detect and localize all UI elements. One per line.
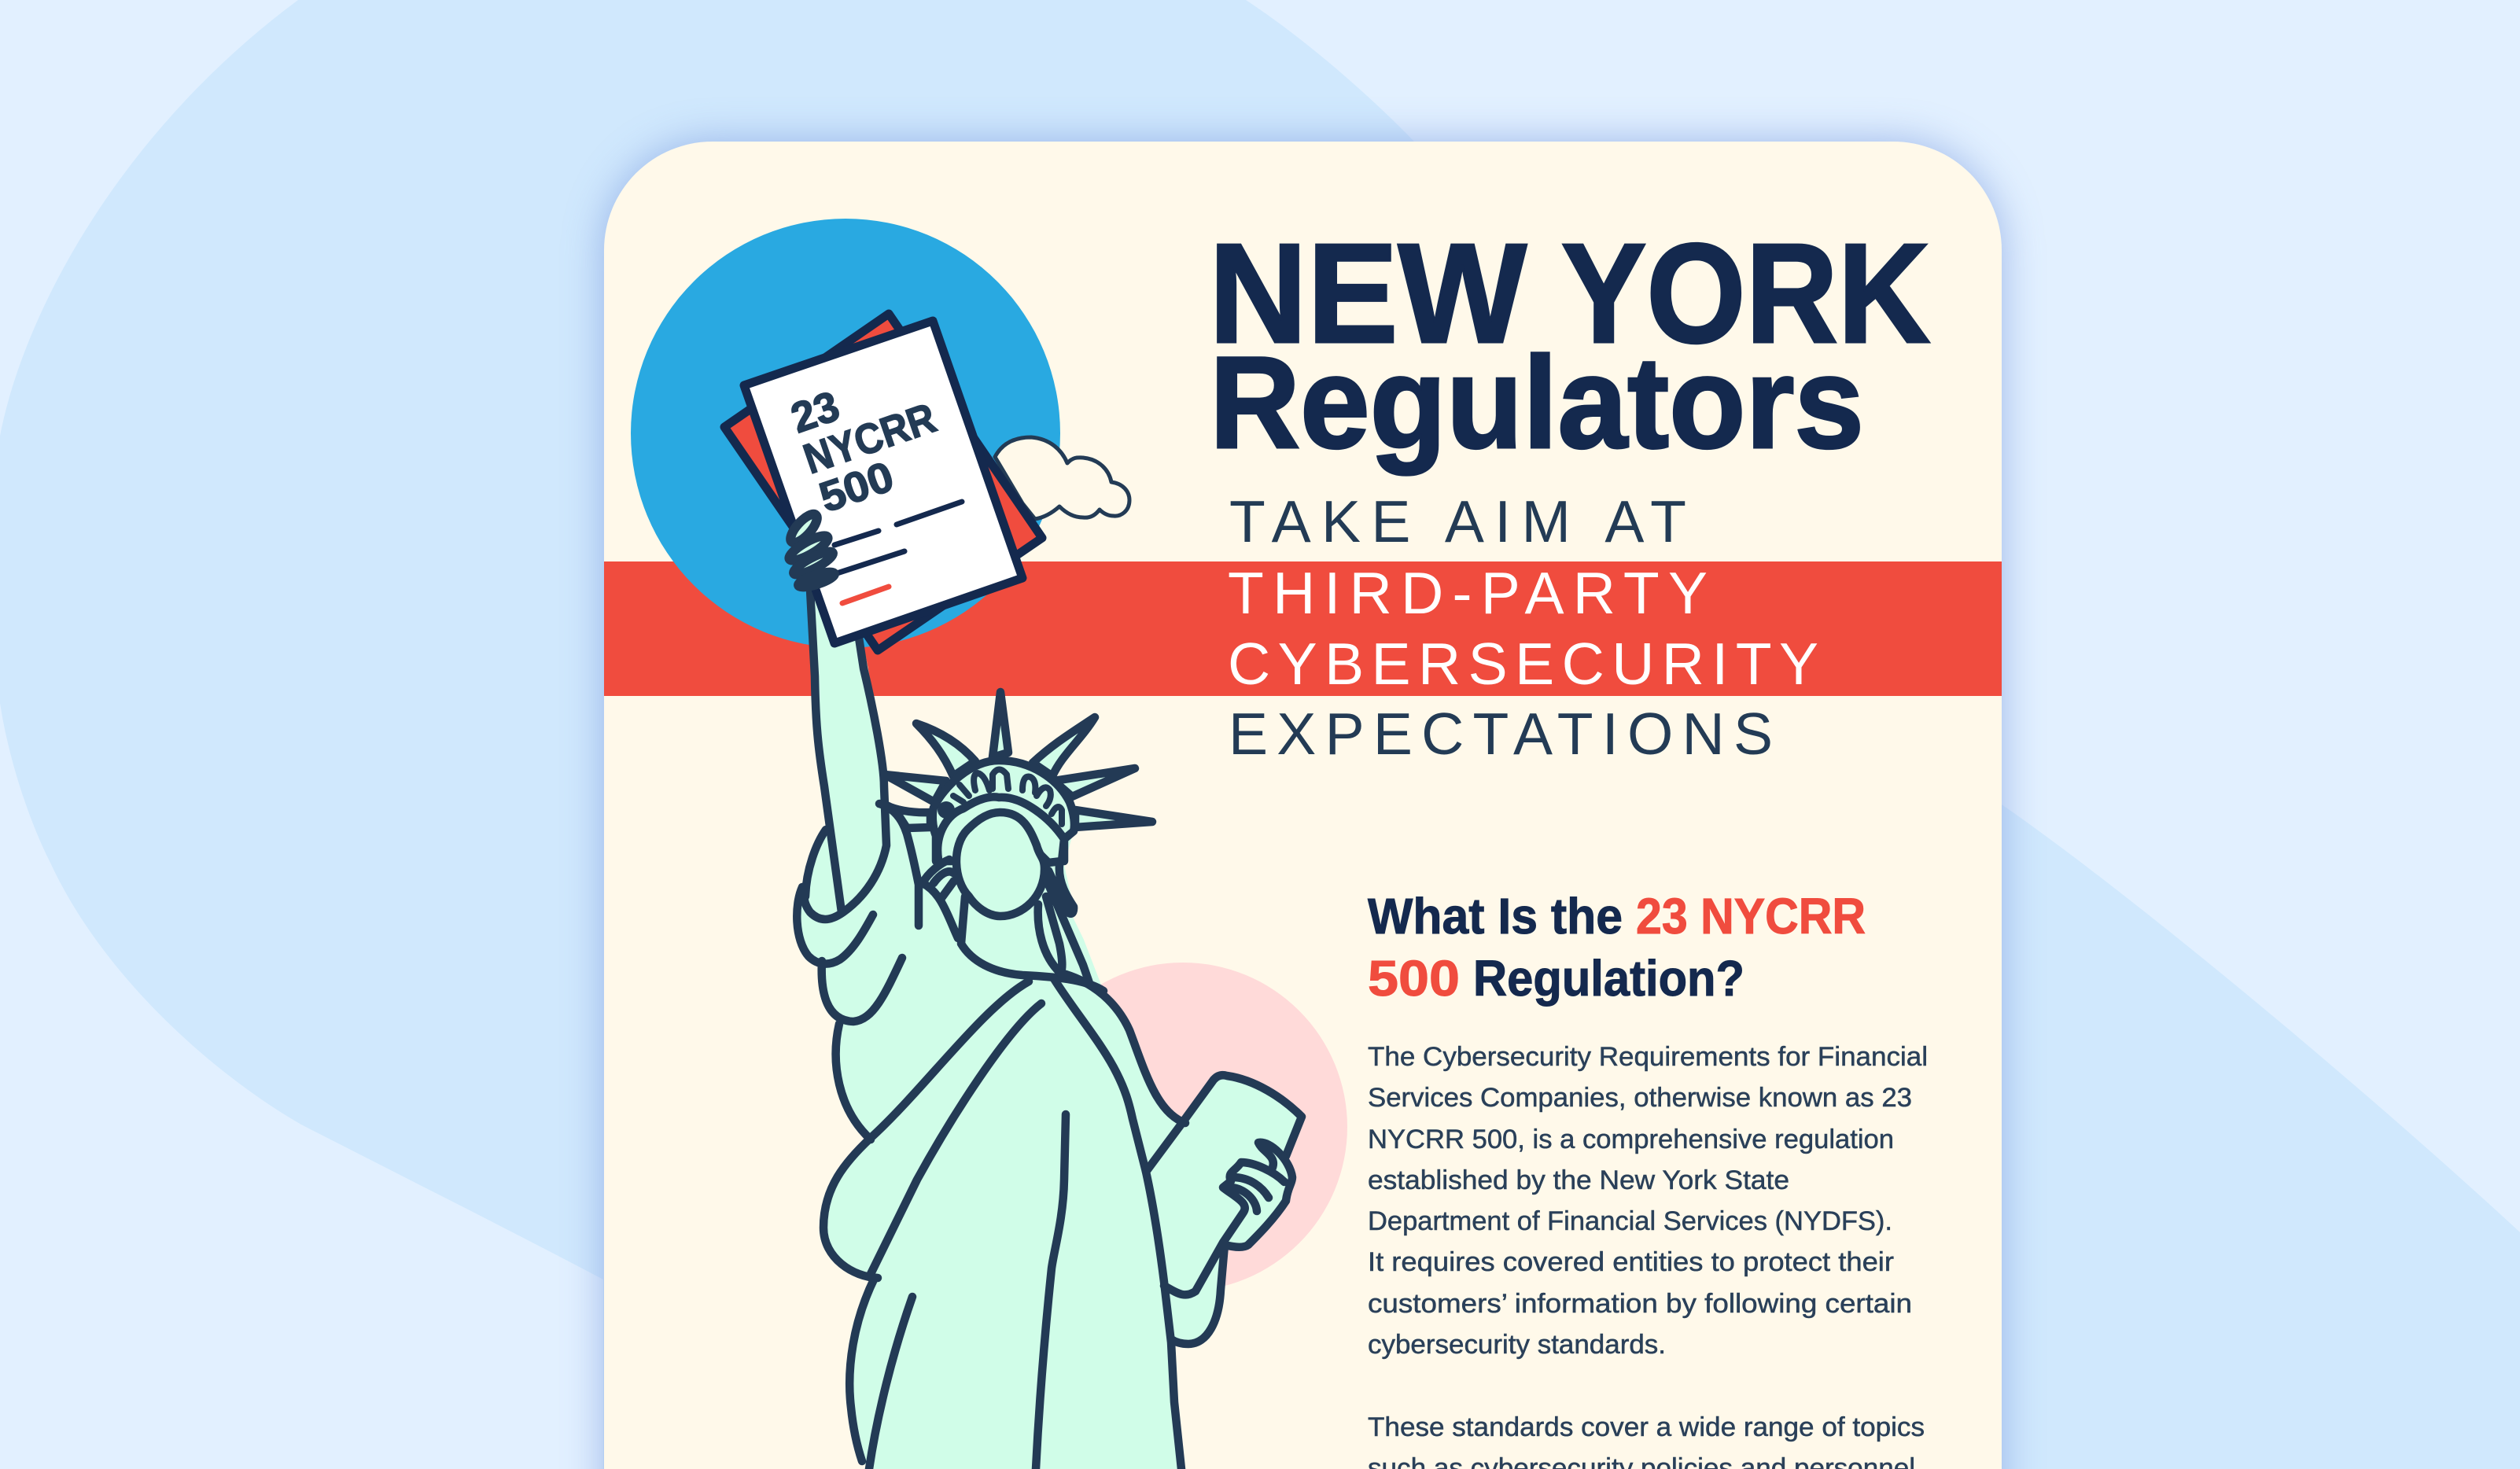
- title: Regulators: [1210, 330, 1864, 476]
- subtitle: THIRD-PARTY: [1228, 560, 1708, 626]
- body text: Department of Financial Services (NYDFS).: [1368, 1206, 1892, 1236]
- raised arm: [810, 590, 842, 912]
- crown rays: [884, 692, 1152, 828]
- card shadow: [604, 142, 2002, 1469]
- body text: [1368, 1042, 1928, 1469]
- statue body fill: [797, 586, 1304, 1469]
- statue of liberty illustration: [797, 586, 1304, 1469]
- body text: The Cybersecurity Requirements for Financial: [1368, 1042, 1928, 1072]
- document title text: 23: [785, 382, 846, 442]
- section heading: Regulation?: [1473, 950, 1744, 1007]
- pink circle: [1019, 963, 1347, 1291]
- left sleeve folds: [797, 804, 919, 1022]
- body text: These standards cover a wide range of topics: [1368, 1412, 1925, 1442]
- subtitle: [1228, 488, 1818, 767]
- red banner: [604, 561, 2002, 696]
- right hand and sleeve: [1164, 1143, 1292, 1344]
- section heading: 23 NYCRR: [1636, 888, 1866, 944]
- document title text: NYCRR: [798, 394, 941, 483]
- icon: cloud: [995, 437, 1129, 519]
- section heading: 500: [1368, 950, 1460, 1007]
- document title text: [785, 382, 941, 521]
- section heading: [1368, 888, 1866, 1007]
- hair and neck: [923, 860, 1103, 991]
- body text: Services Companies, otherwise known as 23: [1368, 1083, 1912, 1113]
- face: [956, 812, 1044, 916]
- subtitle: EXPECTATIONS: [1229, 701, 1773, 767]
- section heading: What Is the: [1368, 888, 1623, 944]
- body text: cybersecurity standards.: [1368, 1330, 1666, 1360]
- document: red back sheet: [724, 314, 1042, 650]
- crown: [933, 760, 1074, 863]
- card panel: [604, 142, 2002, 1469]
- body text: established by the New York State: [1368, 1165, 1789, 1195]
- body text: It requires covered entities to protect their: [1368, 1247, 1894, 1277]
- tablet: [1146, 1075, 1302, 1172]
- title: YORK: [1561, 215, 1930, 373]
- raised hand gripping document: [787, 510, 836, 590]
- blue circle: [631, 219, 1060, 648]
- title: NEW: [1209, 215, 1527, 373]
- title: [1209, 215, 1930, 476]
- body text: customers’ information by following certain: [1368, 1289, 1912, 1319]
- body text: NYCRR 500, is a comprehensive regulation: [1368, 1125, 1894, 1154]
- document: white front page: [744, 321, 1022, 643]
- subtitle: TAKE AIM AT: [1229, 488, 1686, 554]
- subtitle: CYBERSECURITY: [1228, 631, 1818, 697]
- document title text: 500: [813, 453, 900, 521]
- document lines: [834, 502, 962, 603]
- robe lines: [823, 973, 1185, 1469]
